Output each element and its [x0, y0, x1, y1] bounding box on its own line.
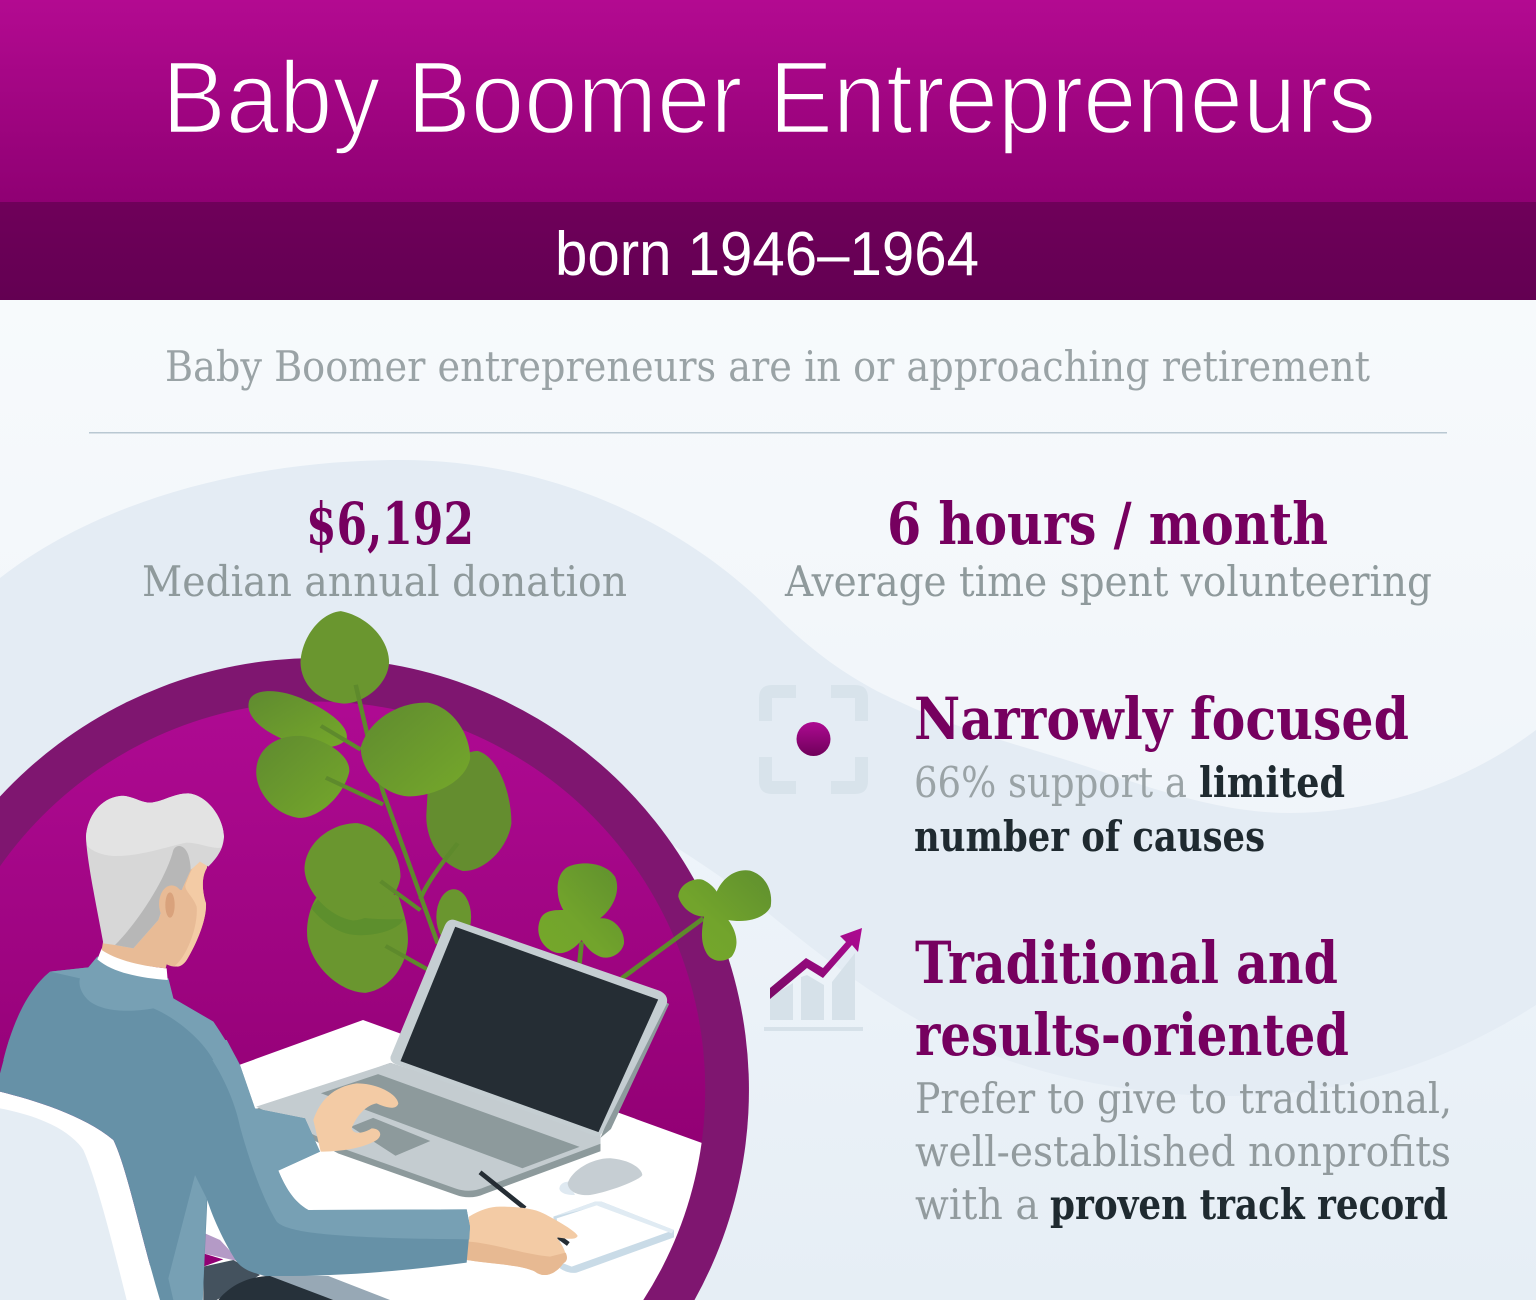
- stat: volunteering: 6 hours / month: [887, 490, 1328, 558]
- subtitle band: [0, 202, 1536, 300]
- heading: narrowly focused: [914, 685, 1409, 861]
- tablet: [553, 1202, 674, 1273]
- under-desk: [203, 1233, 390, 1300]
- traditional body text: Prefer to give to traditional,: [915, 1074, 1452, 1123]
- heading: traditional and results-oriented: results-oriented: [915, 1001, 1349, 1069]
- heading: traditional and results-oriented: [915, 929, 1452, 1229]
- stat: median donation: [142, 490, 627, 606]
- page background: [0, 300, 1536, 1300]
- icon: focus target: [759, 685, 868, 794]
- stems: [321, 685, 458, 970]
- focused body text: 66% support a: [914, 758, 1187, 807]
- collar: [97, 948, 168, 980]
- circle inner: [0, 702, 705, 1300]
- hair: [86, 793, 224, 948]
- traditional body text: with a: [915, 1180, 1039, 1229]
- man: head and shoulders: [3, 793, 237, 1060]
- left hand: [313, 1083, 398, 1152]
- laptop: [256, 920, 669, 1197]
- subtitle: born 1946–1964: [555, 220, 979, 289]
- circle ring: [0, 658, 749, 1300]
- man: torso and arms: [0, 1040, 470, 1300]
- title: Baby Boomer Entrepreneurs: [162, 40, 1376, 155]
- heading: narrowly focused: Narrowly focused: [914, 685, 1409, 753]
- traditional body text: well-established nonprofits: [915, 1127, 1451, 1176]
- stat: median donation: $6,192: [306, 490, 474, 558]
- desk: [150, 1020, 760, 1300]
- clovers: [538, 863, 771, 978]
- mouse: [559, 1158, 642, 1195]
- traditional body text: proven track record: [1050, 1180, 1448, 1229]
- chair: [0, 1092, 160, 1300]
- plant: [248, 611, 511, 993]
- focused body text: number of causes: [914, 812, 1265, 861]
- laptop screen: [400, 927, 658, 1132]
- illustration: man at laptop in circle: [0, 611, 771, 1300]
- intro text: Baby Boomer entrepreneurs are in or approaching retirement: [165, 342, 1370, 391]
- leaves: [436, 889, 471, 945]
- pen: [480, 1172, 568, 1244]
- stat: volunteering: [784, 490, 1432, 606]
- traditional body text: [915, 1074, 1452, 1229]
- heading: traditional and results-oriented: Traditional and: [915, 929, 1338, 997]
- stat: volunteering: Average time spent volunteering: [784, 557, 1432, 606]
- focused body text: [914, 758, 1345, 861]
- focused body text: limited: [1199, 758, 1345, 807]
- header band: [0, 0, 1536, 202]
- stat: median donation: Median annual donation: [142, 557, 627, 606]
- desk items: mouse, tablet, pen, hand: [467, 1158, 674, 1275]
- neck and face: [102, 862, 207, 968]
- icon: growth chart: [764, 928, 863, 1031]
- ear: [159, 885, 184, 923]
- right hand: [467, 1207, 578, 1275]
